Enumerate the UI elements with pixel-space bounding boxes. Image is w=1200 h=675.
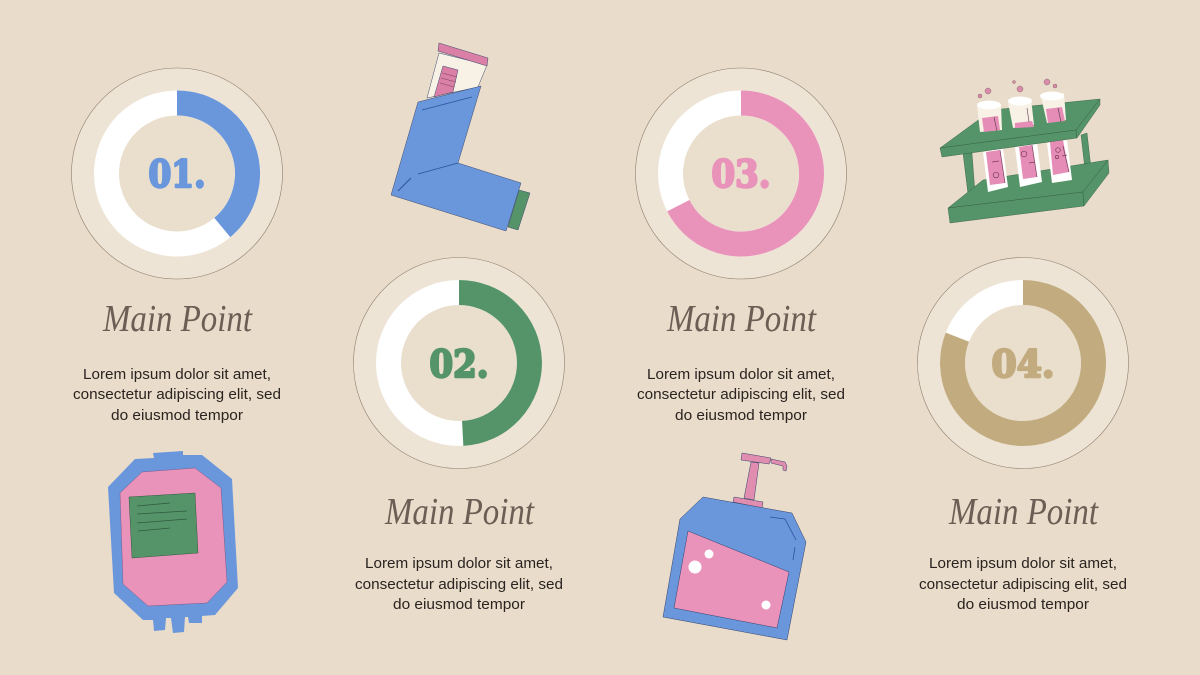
heading 03: Main Point [666, 298, 817, 340]
body text 04 [919, 556, 1127, 613]
body text 02: consectetur adipiscing elit, sed [355, 577, 563, 593]
heading 04: Main Point [948, 491, 1099, 533]
body text 03: do eiusmod tempor [675, 408, 807, 424]
upper tubes [977, 92, 1066, 132]
donut chart 02 [354, 258, 564, 468]
body text 01: consectetur adipiscing elit, sed [73, 387, 281, 403]
donut chart 03 [636, 68, 846, 279]
number 04: 04. [992, 342, 1054, 386]
donut chart 04 [918, 258, 1128, 468]
bubbles [978, 79, 1057, 98]
icon: pump bottle [663, 453, 806, 640]
number 01: 01. [148, 152, 206, 196]
panel: point 02 [354, 258, 564, 613]
body text 01: do eiusmod tempor [111, 408, 243, 424]
icon: blood bag [108, 451, 238, 633]
rack shelf [940, 99, 1100, 157]
heading 02: Main Point [384, 491, 535, 533]
body text 04: Lorem ipsum dolor sit amet, [929, 556, 1117, 572]
icon: inhaler [391, 43, 530, 231]
panel: point 01 [72, 68, 282, 424]
body text 03: consectetur adipiscing elit, sed [637, 387, 845, 403]
body text 01 [73, 367, 281, 424]
body text 04: do eiusmod tempor [957, 597, 1089, 613]
heading 01: Main Point [102, 298, 253, 340]
body text 02 [355, 556, 563, 613]
body text 03 [637, 367, 845, 424]
body text 01: Lorem ipsum dolor sit amet, [83, 367, 271, 383]
body text 04: consectetur adipiscing elit, sed [919, 577, 1127, 593]
number 02: 02. [430, 342, 488, 386]
number 03: 03. [712, 152, 770, 196]
rack legs [963, 133, 1092, 194]
body text 02: do eiusmod tempor [393, 597, 525, 613]
rack base [948, 160, 1109, 223]
donut chart 01 [72, 68, 282, 279]
body text 02: Lorem ipsum dolor sit amet, [365, 556, 553, 572]
panel: point 04 [918, 258, 1128, 613]
lower tubes [983, 140, 1072, 192]
icon: test tube rack [940, 79, 1109, 223]
panel: point 03 [636, 68, 846, 424]
body text 03: Lorem ipsum dolor sit amet, [647, 367, 835, 383]
